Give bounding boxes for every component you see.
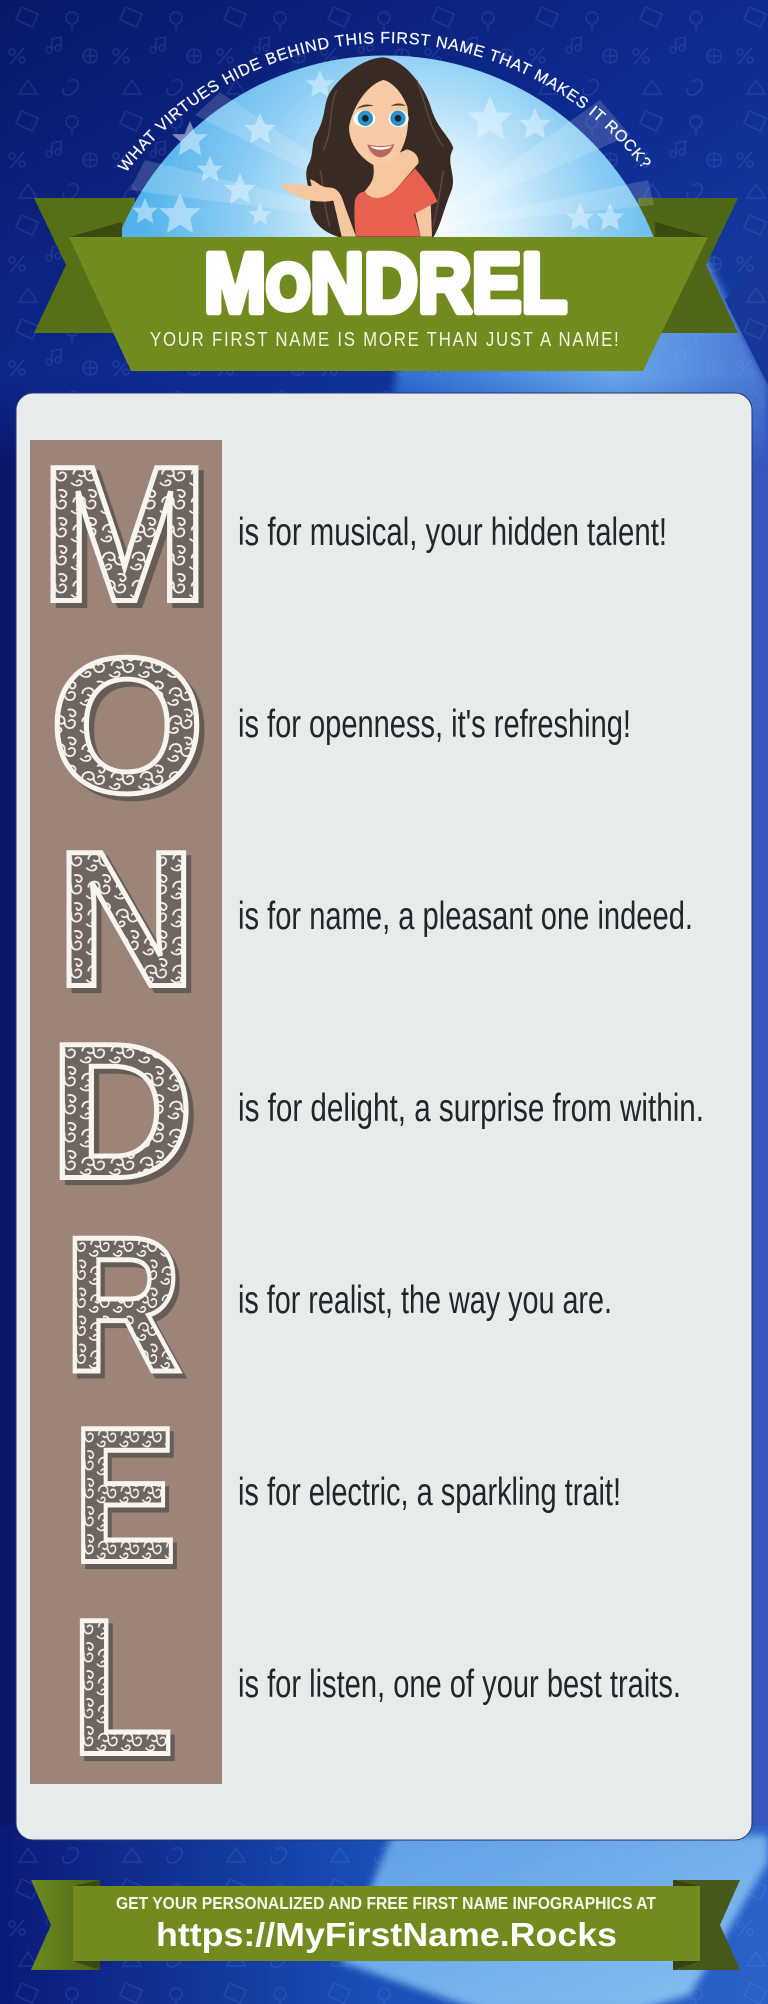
text E: is for electric, a sparkling trait!	[238, 1471, 621, 1514]
text O: is for openness, it's refreshing!	[238, 703, 631, 746]
ribbon: footer banner	[31, 1880, 740, 1970]
mouth	[367, 144, 394, 157]
curved heading: WHAT VIRTUES HIDE BEHIND THIS FIRST NAME THAT MAKES IT ROCK?	[117, 32, 651, 170]
panel: dome with stars	[118, 55, 654, 238]
face	[349, 80, 408, 166]
letter D: D	[49, 1002, 194, 1219]
tagline: YOUR FIRST NAME IS MORE THAN JUST A NAME!	[150, 328, 619, 350]
letter column	[30, 440, 222, 1784]
letter L: L	[71, 1580, 173, 1795]
ribbon: title banner	[69, 222, 708, 371]
letter R: R	[64, 1196, 182, 1412]
illustration: woman	[283, 57, 453, 237]
neck and chest	[364, 149, 419, 198]
arm and hand	[283, 179, 356, 237]
right arm	[413, 202, 432, 237]
text R: is for realist, the way you are.	[238, 1279, 612, 1322]
title: M	[204, 236, 274, 330]
letter M: M	[40, 427, 209, 642]
shirt	[354, 168, 437, 237]
panel: letters and meanings	[16, 393, 752, 1840]
title: O	[266, 251, 310, 323]
title: NDREL	[310, 236, 567, 330]
hair strands	[320, 80, 443, 227]
footer line: GET YOUR PERSONALIZED AND FREE FIRST NAME INFOGRAPHICS AT	[116, 1893, 656, 1913]
eyebrows	[356, 103, 406, 109]
hair	[306, 57, 453, 237]
letter N: N	[56, 811, 197, 1027]
letter O: O	[49, 618, 205, 833]
letter E: E	[73, 1388, 177, 1603]
eyes	[353, 110, 409, 127]
footer url: https://MyFirstName.Rocks	[156, 1916, 617, 1953]
ribbon tails: title banner	[34, 198, 738, 333]
